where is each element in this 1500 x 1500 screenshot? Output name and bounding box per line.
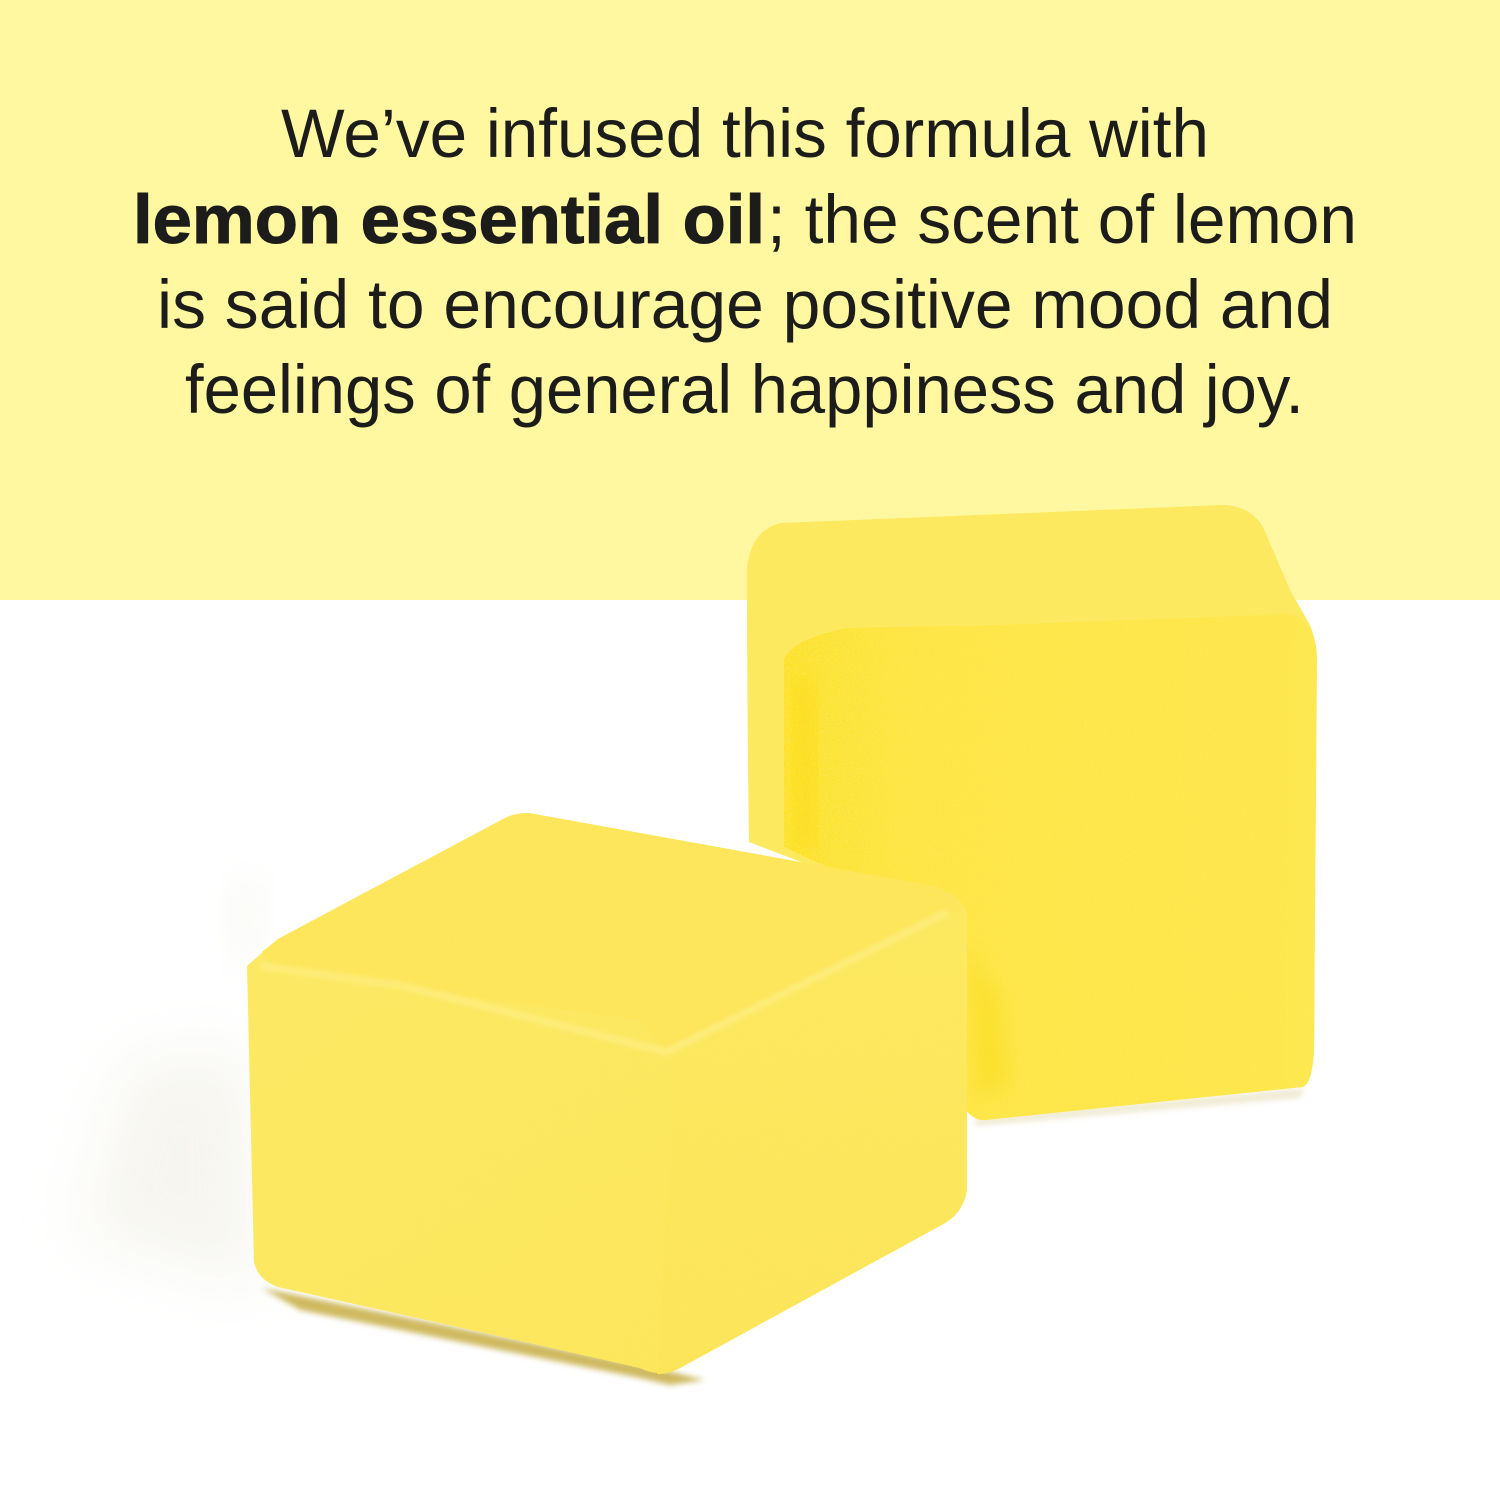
- bath bomb: back cube: [747, 505, 1317, 1120]
- headline text block: lemon essential oil: [133, 181, 765, 258]
- headline text block: feelings of general happiness and joy.: [185, 351, 1304, 428]
- product shadows: [80, 880, 1305, 1385]
- back cube inner panel lower shading: [970, 950, 1010, 1095]
- front cube top face: [262, 813, 962, 1050]
- back cube front face: [784, 614, 1316, 1120]
- back cube silhouette and top face: [747, 505, 1317, 1120]
- headline text block: is said to encourage positive mood and: [157, 266, 1333, 343]
- front cube silhouette and left face: [247, 813, 967, 1373]
- headline text block: [133, 95, 1357, 428]
- bath bomb: front cube: [247, 813, 967, 1374]
- front cube right face: [657, 912, 967, 1374]
- back cube left shaded band: [795, 680, 815, 850]
- yellow header panel: [0, 0, 1500, 600]
- back cube right rim: [1285, 625, 1316, 1087]
- headline text block: ; the scent of lemon: [767, 181, 1357, 258]
- headline text block: We’ve infused this formula with: [281, 95, 1209, 172]
- front cube top face highlight rim: [262, 912, 947, 1052]
